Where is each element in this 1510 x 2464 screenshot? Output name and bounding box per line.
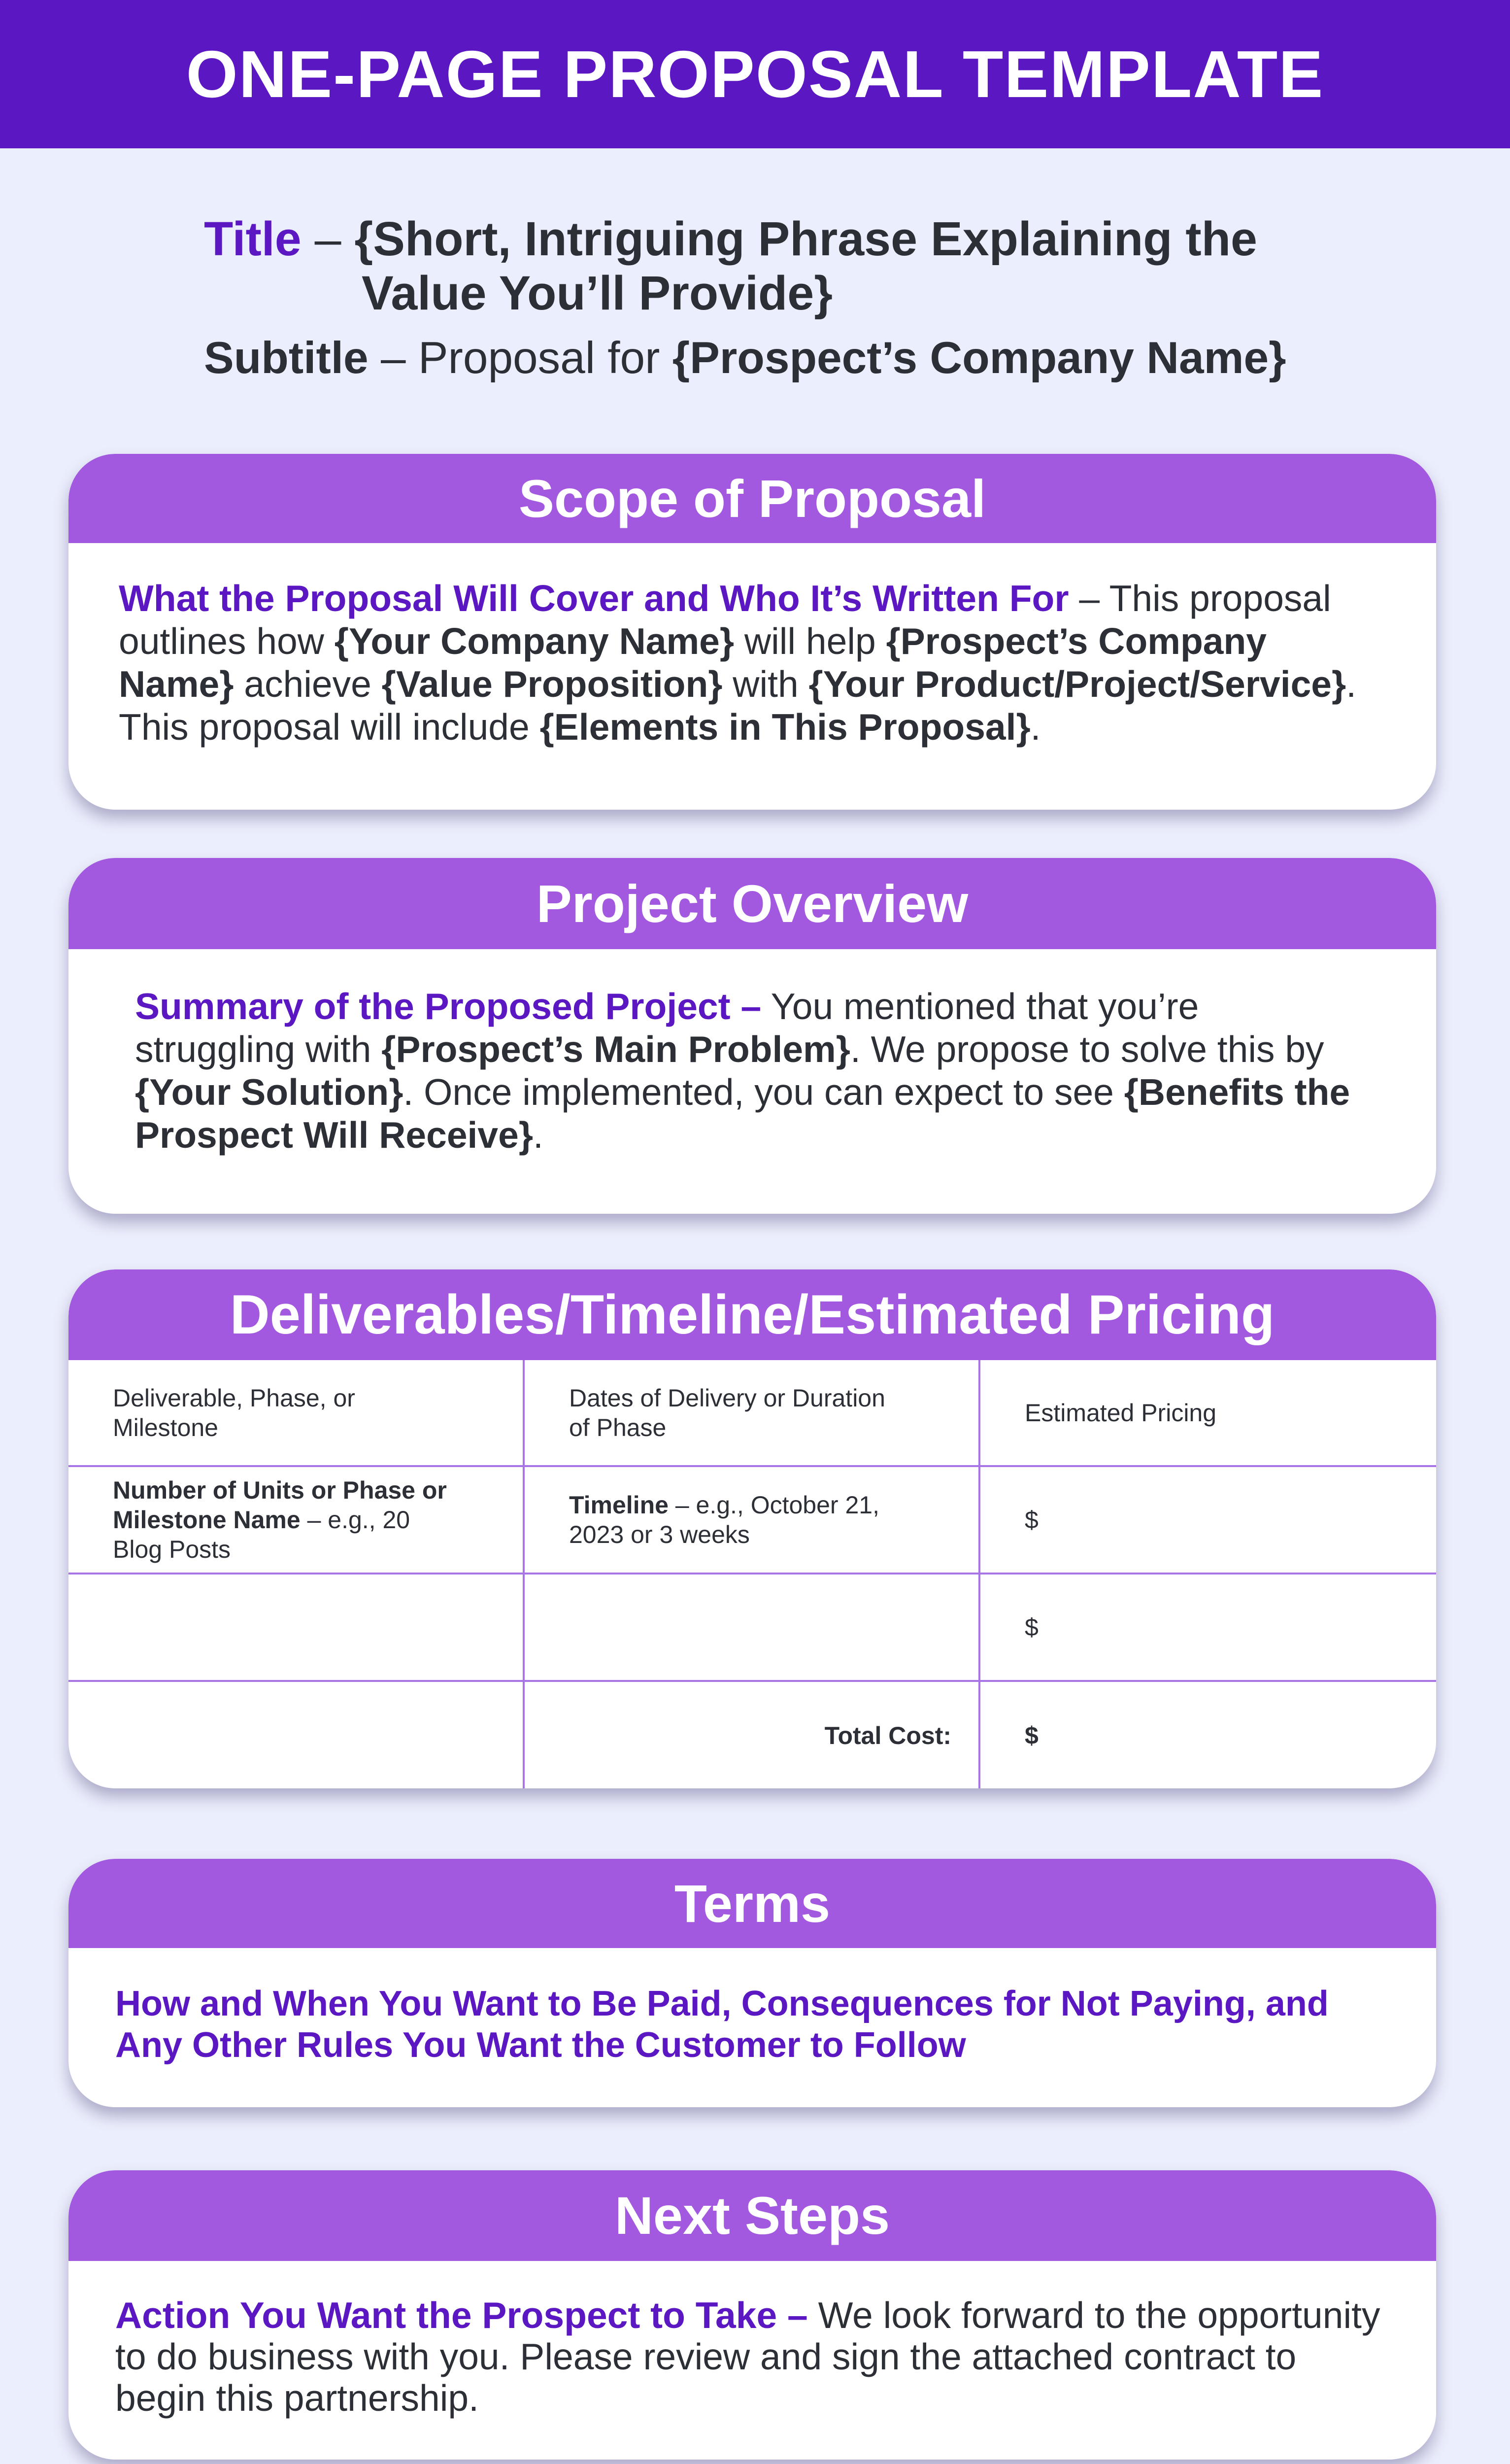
text: scope body: What the Proposal Will Cover and Who It’s Written For – This proposal <box>119 578 1331 619</box>
table: deliverables: Milestone Name – e.g., 20 <box>113 1506 410 1534</box>
text: terms body: How and When You Want to Be Paid, Consequences for Not Paying, and <box>115 1984 1329 2023</box>
table: deliverables: Total Cost: <box>825 1722 951 1749</box>
text: scope body: This proposal will include {Elements in This Proposal}. <box>119 706 1040 748</box>
heading: deliverables <box>68 1269 1436 1360</box>
panel: deliverables <box>68 1269 1436 1788</box>
table: deliverables: Blog Posts <box>113 1536 231 1563</box>
heading: next steps: Next Steps <box>615 2186 890 2245</box>
header banner: ONE-PAGE PROPOSAL TEMPLATE <box>186 37 1324 111</box>
table: deliverables: Dates of Delivery or Duration <box>569 1384 885 1411</box>
table: deliverables: Milestone <box>113 1413 218 1441</box>
text: next steps body <box>115 2294 1380 2419</box>
heading: scope <box>68 454 1436 543</box>
panel: terms <box>68 1859 1436 2107</box>
text: overview body: Summary of the Proposed Project – You mentioned that you’re <box>135 986 1199 1027</box>
text: next steps body: begin this partnership. <box>115 2377 479 2419</box>
heading: overview: Project Overview <box>537 874 968 933</box>
heading: next steps <box>68 2170 1436 2261</box>
title block <box>204 212 1286 383</box>
table: deliverables: Deliverable, Phase, or <box>113 1384 355 1411</box>
table: deliverables: 2023 or 3 weeks <box>569 1521 750 1548</box>
panel: project overview <box>68 858 1436 1214</box>
title block: Title – {Short, Intriguing Phrase Explaining the <box>204 212 1257 266</box>
title block: Value You’ll Provide} <box>362 266 833 320</box>
table: deliverables: of Phase <box>569 1413 666 1441</box>
table: deliverables: $ <box>1025 1613 1039 1641</box>
table: deliverables: Number of Units or Phase or <box>113 1476 447 1504</box>
text: terms body <box>115 1984 1329 2065</box>
text: scope body <box>119 578 1356 748</box>
text: overview body <box>135 986 1350 1156</box>
heading: overview <box>68 858 1436 949</box>
table: deliverables: $ <box>1025 1506 1039 1534</box>
title block: Subtitle – Proposal for {Prospect’s Company Name} <box>204 333 1286 383</box>
heading: terms: Terms <box>674 1874 830 1933</box>
table: deliverables <box>68 1360 1436 1788</box>
heading: deliverables: Deliverables/Timeline/Estimated Pricing <box>230 1284 1275 1345</box>
text: scope body: outlines how {Your Company Name} will help {Prospect’s Company <box>119 620 1267 662</box>
table: deliverables: Timeline – e.g., October 21, <box>569 1491 879 1519</box>
text: next steps body: Action You Want the Prospect to Take – We look forward to the opportunity <box>115 2294 1380 2336</box>
heading: terms <box>68 1859 1436 1948</box>
text: overview body: {Your Solution}. Once implemented, you can expect to see {Benefits the <box>135 1071 1350 1113</box>
heading: scope: Scope of Proposal <box>519 469 986 528</box>
text: next steps body: to do business with you. Please review and sign the attached contract to <box>115 2336 1296 2377</box>
text: overview body: Prospect Will Receive}. <box>135 1114 543 1156</box>
text: terms body: Any Other Rules You Want the Customer to Follow <box>115 2025 966 2065</box>
text: overview body: struggling with {Prospect’s Main Problem}. We propose to solve this by <box>135 1028 1324 1070</box>
header banner <box>0 0 1510 148</box>
table: deliverables: Estimated Pricing <box>1025 1399 1216 1426</box>
table: deliverables: $ <box>1025 1722 1039 1749</box>
text: scope body: Name} achieve {Value Proposition} with {Your Product/Project/Service}. <box>119 663 1356 705</box>
panel: scope of proposal <box>68 454 1436 810</box>
panel: next steps <box>68 2170 1436 2460</box>
